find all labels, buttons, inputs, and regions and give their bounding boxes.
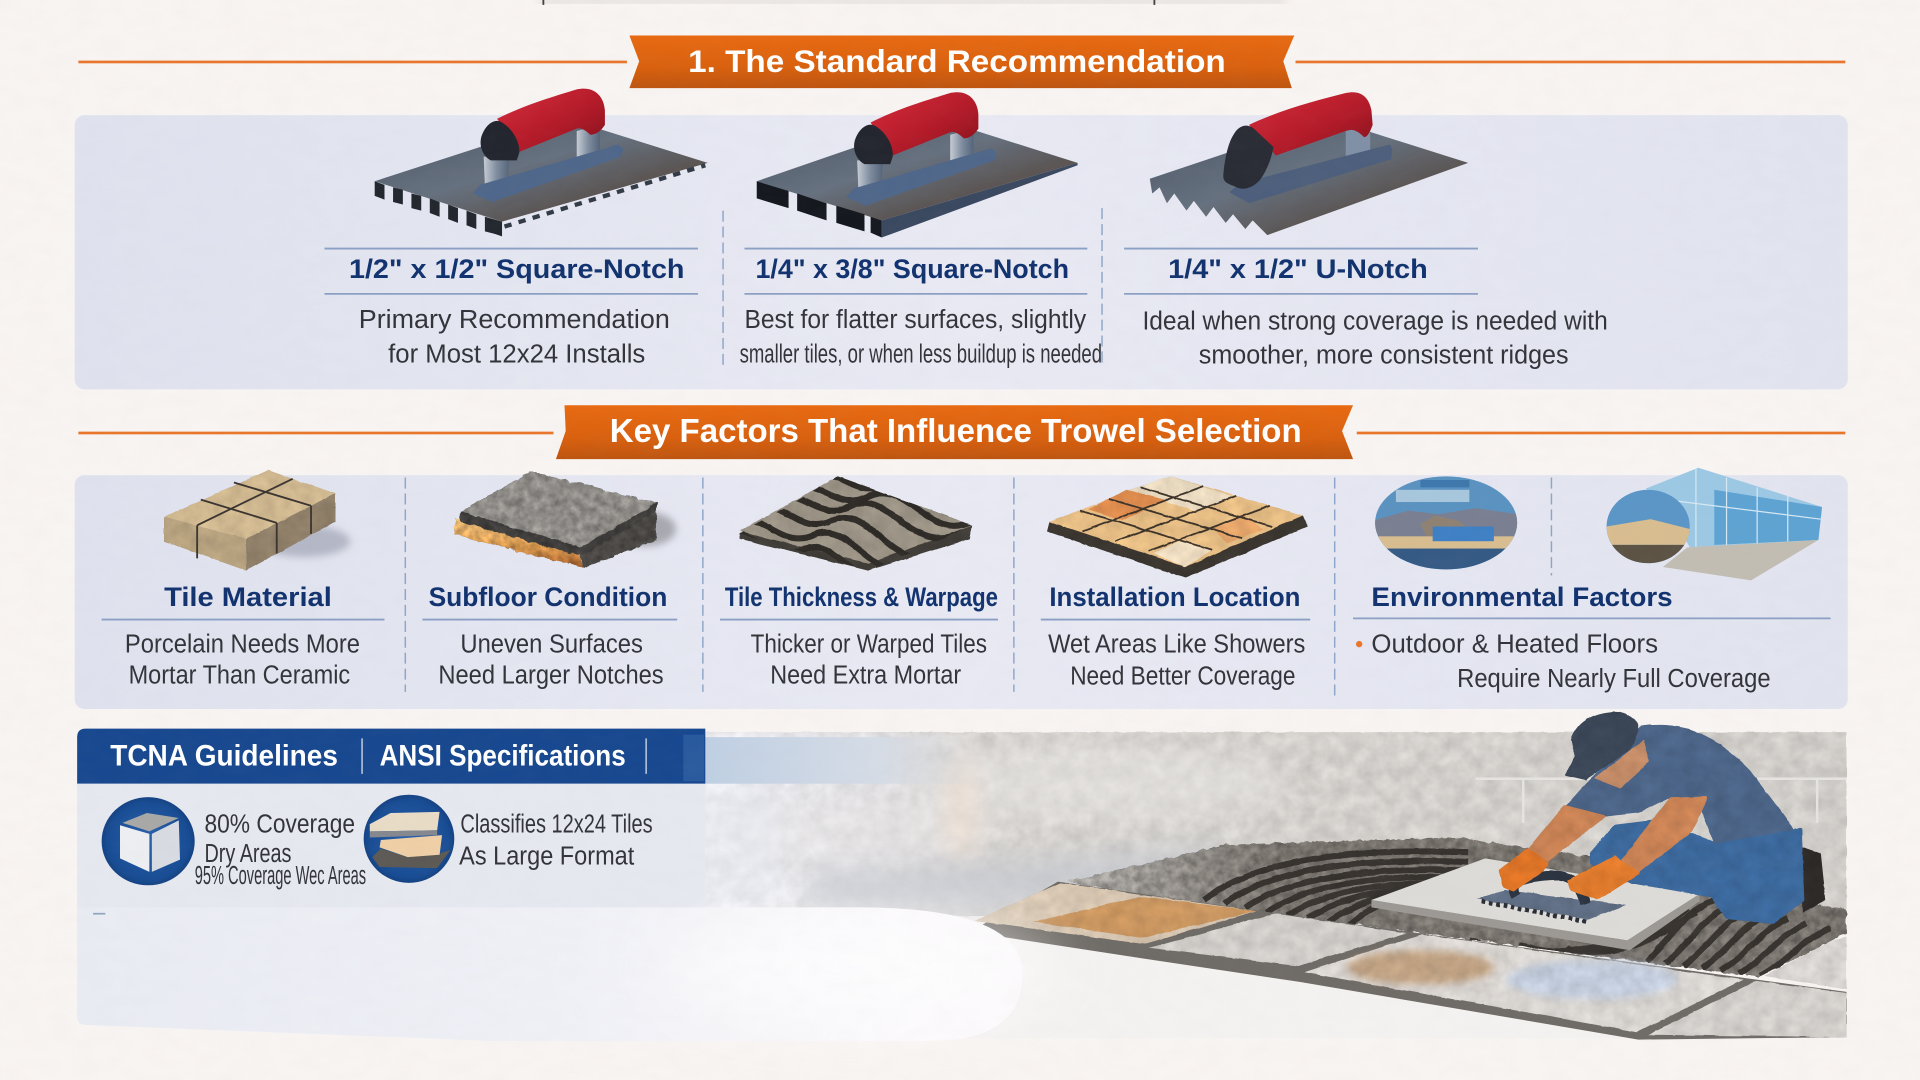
text block: 1/4 x 1/2 U-notch: 1/4" x 1/2" U-Notch — [1168, 254, 1428, 284]
card: installation location: Wet Areas Like Showers — [1048, 631, 1305, 659]
card: tile thickness and warpage: Tile Thickness & Warpage — [725, 582, 998, 612]
card: tile material — [102, 582, 384, 689]
text block: 1/4 x 1/2 U-notch — [1124, 249, 1608, 370]
icon: stacked large-format tiles — [364, 795, 454, 883]
work tile — [1371, 894, 1700, 950]
text block: 1/4 x 1/2 U-notch: smoother, more consistent ridges — [1199, 342, 1569, 370]
card: environmental factors: Environmental Factors — [1371, 582, 1673, 612]
panel: standard recommendation — [75, 115, 1848, 389]
card: subfloor condition — [422, 582, 677, 689]
card: installation location: Installation Location — [1049, 582, 1300, 612]
text block: 1/2 x 1/2 square-notch: Primary Recommendation — [359, 306, 670, 334]
text block: 1/2 x 1/2 square-notch — [324, 249, 698, 368]
card: subfloor condition: Subfloor Condition — [429, 582, 667, 612]
card: tile material: Mortar Than Ceramic — [129, 661, 350, 689]
card: tile material: Porcelain Needs More — [125, 631, 360, 659]
icon: outdoor environment circle — [1371, 475, 1521, 571]
text block: 1/4 x 3/8 square-notch — [740, 249, 1102, 368]
card: tile thickness and warpage: Thicker or Warped Tiles — [751, 631, 987, 659]
card: tile thickness and warpage: Need Extra Mortar — [770, 661, 962, 689]
card: subfloor condition: Need Larger Notches — [438, 661, 664, 689]
heading: The Standard Recommendation — [78, 36, 1845, 88]
heading: Key Factors — [78, 405, 1845, 459]
wall — [698, 732, 1847, 916]
header strip: TCNA and ANSI: TCNA Guidelines — [110, 739, 338, 772]
text block: coverage requirements — [195, 811, 366, 890]
icon: square-notch trowel 3/8 — [757, 92, 1078, 238]
text block: large format classification: As Large Format — [459, 842, 634, 870]
card: installation location — [1041, 582, 1310, 690]
icon: subfloor condition — [454, 471, 676, 568]
worker — [1477, 711, 1826, 922]
header strip: TCNA and ANSI — [77, 729, 992, 784]
panel: key factors — [75, 475, 1848, 709]
card: environmental factors — [1353, 582, 1831, 693]
icon: heated floor and glass building — [1607, 468, 1822, 580]
mortar bed — [1069, 838, 1847, 977]
icon: tile material — [164, 470, 350, 571]
floor under tiles — [698, 918, 1847, 1041]
icon: square-notch trowel 1/2 — [375, 89, 708, 236]
heading: Key Factors: Key Factors That Influence Trowel Selection — [610, 413, 1302, 450]
text block: coverage requirements: 95% Coverage Wec Areas — [195, 862, 366, 890]
card: tile thickness and warpage — [720, 582, 998, 689]
icon: coverage cube — [102, 797, 195, 885]
icon: tile thickness and warpage — [740, 476, 972, 571]
icon: installation location — [1047, 476, 1308, 578]
text block: 1/4 x 3/8 square-notch: smaller tiles, or when less buildup is needed — [740, 340, 1102, 368]
card: tile material: Tile Material — [164, 582, 332, 612]
heading: The Standard Recommendation: 1. The Standard Recommendation — [688, 43, 1226, 79]
text block: 1/4 x 1/2 U-notch: Ideal when strong coverage is needed with — [1142, 307, 1608, 335]
card: environmental factors: Require Nearly Full Coverage — [1457, 665, 1771, 693]
card: subfloor condition: Uneven Surfaces — [460, 631, 643, 659]
text block: coverage requirements: Dry Areas — [204, 840, 291, 868]
floor tiles — [970, 882, 1847, 1040]
card: environmental factors: Outdoor & Heated Floors — [1371, 631, 1658, 659]
card: installation location: Need Better Coverage — [1070, 662, 1296, 690]
soft floor shadow — [808, 847, 1224, 912]
panel: standards background — [77, 784, 1053, 1041]
cropped text remnant at top edge — [539, 0, 1286, 5]
illustration: tile installer scene — [698, 711, 1847, 1041]
trowel in hand — [1477, 890, 1626, 920]
header strip: TCNA and ANSI: ANSI Specifications — [380, 739, 626, 772]
text block: 1/4 x 3/8 square-notch: Best for flatter surfaces, slightly — [744, 306, 1086, 334]
text block: 1/2 x 1/2 square-notch: for Most 12x24 Installs — [388, 340, 645, 368]
icon: U-notch trowel — [1150, 92, 1468, 235]
text block: large format classification: Classifies 12x24 Tiles — [460, 811, 653, 839]
text block: 1/4 x 3/8 square-notch: 1/4" x 3/8" Square-Notch — [756, 254, 1069, 284]
text block: large format classification — [459, 811, 653, 870]
text block: coverage requirements: 80% Coverage — [204, 811, 355, 839]
text block: 1/2 x 1/2 square-notch: 1/2" x 1/2" Square-Notch — [349, 254, 684, 284]
